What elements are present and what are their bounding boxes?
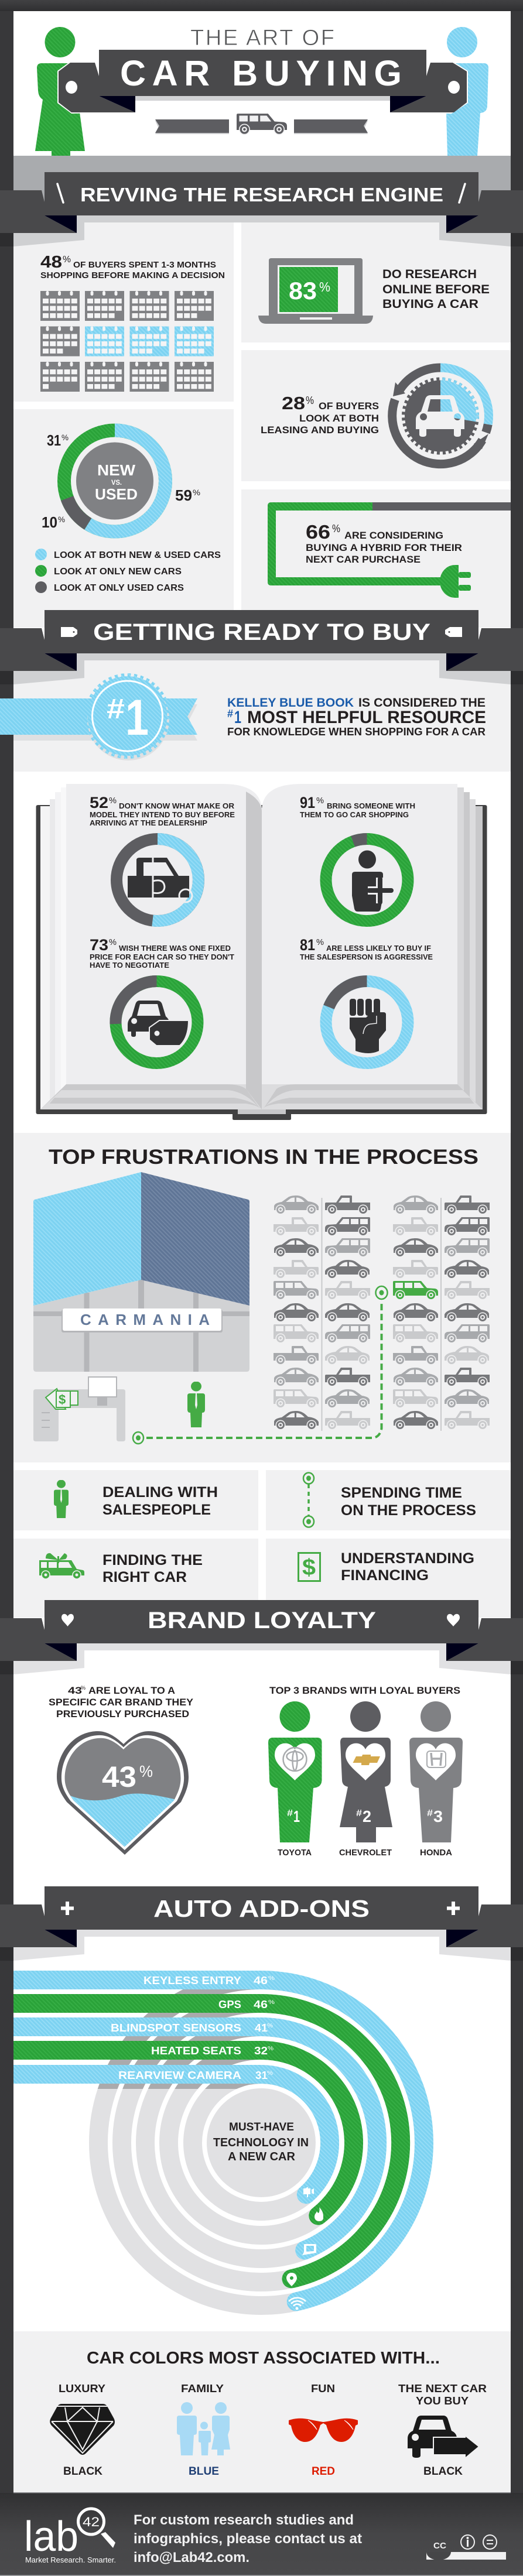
band labels: BLINDSPOT SENSORS	[111, 2022, 241, 2034]
column: next car: BLACK	[423, 2465, 463, 2478]
donut chart	[64, 430, 165, 532]
band labels: HEATED SEATS	[151, 2045, 241, 2057]
stat text: BUYING A HYBRID FOR THEIR	[306, 542, 462, 553]
stat text: LOOK AT BOTH	[299, 413, 379, 424]
brand figure: toyota: TOYOTA	[278, 1848, 312, 1858]
icon: price tags	[61, 627, 462, 637]
icon: chat bubble	[302, 2244, 316, 2255]
label	[341, 1485, 476, 1519]
loyalty stat text	[49, 1685, 194, 1719]
icon: plus signs	[61, 1902, 460, 1915]
band labels: %	[268, 1975, 275, 1982]
icon: map pin	[286, 2273, 297, 2286]
column: fun: FUN	[311, 2383, 335, 2395]
stat text: %	[63, 255, 71, 265]
ring chart with car and price tag	[115, 981, 198, 1063]
label	[102, 1484, 218, 1518]
panel: 83 percent online	[258, 258, 490, 324]
band labels: 46	[254, 1975, 268, 1986]
icon: carmania dealership: CARMANIA	[80, 1311, 210, 1328]
stat: 91 percent: THEM TO GO CAR SHOPPING	[300, 810, 409, 819]
label	[102, 1552, 203, 1585]
logo: lab42: lab	[24, 2513, 78, 2560]
stat: 91 percent: %	[316, 796, 324, 806]
label: UNDERSTANDING	[341, 1550, 474, 1567]
label: DEALING WITH	[102, 1484, 218, 1501]
donut labels: 10	[42, 513, 57, 531]
brand figure: chevrolet: #	[356, 1808, 362, 1818]
top brands heading: TOP 3 BRANDS WITH LOYAL BUYERS	[269, 1685, 460, 1696]
stat: 73 percent	[90, 936, 234, 1063]
heading: GETTING READY TO BUY	[93, 619, 430, 645]
legend: LOOK AT ONLY USED CARS	[54, 583, 184, 593]
icon: laptop: %	[319, 279, 330, 294]
icon: dollar bill	[299, 1553, 320, 1581]
heading: BRAND LOYALTY	[148, 1608, 376, 1633]
band labels: 46	[254, 1999, 268, 2010]
center label: TECHNOLOGY IN	[213, 2136, 309, 2149]
label: SPENDING TIME	[341, 1485, 462, 1501]
icon: laptop: 83	[289, 277, 317, 304]
band labels: %	[268, 2046, 274, 2052]
band labels: 41	[255, 2022, 268, 2034]
column: fun: RED	[312, 2465, 335, 2478]
stat text: ONLINE BEFORE	[382, 283, 490, 296]
stat text: OF BUYERS SPENT 1-3 MONTHS	[73, 260, 216, 270]
section banner: brand loyalty	[0, 1600, 523, 1674]
brand figure: honda: 3	[433, 1807, 443, 1825]
logo: lab42	[24, 2509, 116, 2564]
resource text: #	[227, 708, 233, 720]
stat text: DO RESEARCH	[382, 268, 477, 281]
label: RIGHT CAR	[102, 1569, 187, 1585]
footer background	[0, 2493, 523, 2576]
icon: diamond	[50, 2404, 115, 2455]
panel: hybrid	[268, 502, 511, 598]
icon: money tag	[46, 1389, 78, 1409]
panel: car colors	[13, 2331, 511, 2493]
logo: honda	[427, 1751, 446, 1767]
ring shadows under bands	[97, 1989, 425, 2089]
donut labels: %	[58, 515, 65, 524]
donut labels	[42, 431, 200, 531]
contact text	[134, 2512, 362, 2565]
contact text: info@Lab42.com.	[134, 2550, 249, 2565]
column: luxury	[50, 2383, 115, 2478]
logo: lab42: 42	[83, 2515, 100, 2529]
brand figure: toyota: #	[287, 1808, 293, 1818]
brand figure: chevrolet: CHEVROLET	[339, 1848, 392, 1858]
stat text	[261, 393, 379, 436]
resource text: 1	[234, 708, 241, 727]
stat text: BUYING A CAR	[382, 297, 478, 311]
center label	[213, 2121, 309, 2163]
loyalty stat text: PREVIOUSLY PURCHASED	[56, 1708, 189, 1719]
column: next car	[398, 2383, 487, 2478]
icon: dollar bill: $	[302, 1555, 316, 1580]
open book	[35, 784, 488, 1120]
column: next car: THE NEXT CAR	[398, 2383, 487, 2395]
icon: sales desk with monitor	[33, 1377, 125, 1441]
resource text	[227, 696, 486, 738]
column: family: FAMILY	[181, 2383, 224, 2395]
car lot grid	[274, 1195, 490, 1431]
panel: dealing with salespeople	[13, 1470, 258, 1530]
logo: toyota	[283, 1748, 307, 1771]
stat: 91 percent	[300, 794, 415, 921]
loyalty stat text: %	[81, 1685, 86, 1691]
brand figure: chevrolet	[339, 1701, 392, 1858]
book cover	[36, 805, 487, 1120]
stat text: %	[306, 395, 314, 406]
center disc	[207, 2088, 316, 2197]
ring chart with fist	[326, 981, 408, 1063]
label: SALESPEOPLE	[102, 1502, 211, 1518]
gray band behind first heading	[13, 156, 511, 222]
stat: 73 percent: 73	[90, 936, 108, 954]
band labels: %	[267, 2023, 273, 2029]
icon: salesperson	[54, 1480, 69, 1518]
panel: top frustrations	[13, 1133, 511, 1462]
title banner	[57, 50, 468, 114]
icon: sunglasses	[289, 2419, 358, 2442]
donut labels: 59	[175, 487, 192, 504]
stat: 52 percent: 52	[90, 794, 108, 811]
book pages	[66, 784, 457, 1114]
loyalty stat text: ARE LOYAL TO A	[88, 1685, 175, 1696]
center label: A NEW CAR	[228, 2150, 296, 2163]
gray rings	[89, 2089, 433, 2315]
heading: TOP FRUSTRATIONS IN THE PROCESS	[49, 1146, 478, 1169]
icon: loyalty heart chart: 43	[102, 1760, 136, 1793]
label: ON THE PROCESS	[341, 1502, 476, 1519]
stat: 52 percent: DON'T KNOW WHAT MAKE OR	[119, 801, 235, 810]
creative commons badge: CC	[433, 2541, 446, 2551]
creative commons badge	[426, 2535, 506, 2560]
stat text: 48	[40, 253, 62, 272]
panel: 28 percent leasing	[261, 368, 488, 464]
panel: spending time	[266, 1470, 511, 1530]
title line two: CAR BUYING	[120, 53, 402, 93]
column: next car: YOU BUY	[416, 2395, 469, 2407]
contact text: infographics, please contact us at	[134, 2531, 362, 2547]
stat text: 28	[282, 393, 305, 413]
stat: 81 percent: 81	[300, 936, 315, 954]
panel: finding the right car	[13, 1539, 258, 1618]
icon: carmania dealership	[33, 1172, 249, 1372]
stat: 73 percent: PRICE FOR EACH CAR SO THEY DON'T	[90, 953, 234, 961]
stat text: LEASING AND BUYING	[261, 424, 379, 436]
legend: LOOK AT BOTH NEW & USED CARS	[54, 550, 221, 560]
brand figure: honda	[409, 1701, 463, 1858]
road ribbon and car	[155, 114, 368, 135]
band icons	[286, 2187, 323, 2310]
column: luxury: BLACK	[63, 2465, 102, 2478]
colored bands	[13, 1980, 424, 2302]
stat text: SHOPPING BEFORE MAKING A DECISION	[40, 270, 225, 280]
stat text: %	[332, 523, 340, 535]
icon: wifi signal	[289, 2298, 306, 2306]
heading: CAR COLORS MOST ASSOCIATED WITH...	[87, 2349, 440, 2368]
header	[35, 26, 488, 156]
donut labels: 31	[47, 431, 61, 449]
icon: loyalty heart chart	[57, 1731, 189, 1855]
stat: 52 percent: ARRIVING AT THE DEALERSHIP	[90, 818, 207, 827]
label: FINANCING	[341, 1567, 429, 1584]
center label: MUST-HAVE	[229, 2121, 294, 2133]
column: family: BLUE	[189, 2465, 219, 2478]
title line one: THE ART OF	[190, 26, 334, 50]
stat: 73 percent: %	[109, 937, 117, 947]
band labels: KEYLESS ENTRY	[143, 1975, 241, 1986]
stat: 81 percent: ARE LESS LIKELY TO BUY IF	[326, 944, 431, 953]
brand figure: honda: #	[427, 1808, 433, 1818]
ribbon with number one badge	[0, 675, 197, 761]
stat: 52 percent: %	[109, 796, 117, 806]
heading: REVVING THE RESEARCH ENGINE	[80, 184, 443, 205]
dashed route to car	[133, 1286, 388, 1444]
icon: laptop	[258, 258, 373, 324]
logo: chevrolet	[353, 1755, 380, 1765]
band labels: 31	[255, 2070, 268, 2081]
stat: 81 percent: THE SALESPERSON IS AGGRESSIVE	[300, 953, 433, 961]
stat: 91 percent: BRING SOMEONE WITH	[327, 801, 415, 810]
stat text	[382, 268, 490, 311]
footer edge line	[0, 2575, 523, 2576]
stat: 52 percent: MODEL THEY INTEND TO BUY BEFORE	[90, 810, 235, 819]
icon: loyalty heart chart: %	[139, 1762, 153, 1780]
ring chart with person plus	[326, 839, 408, 921]
ring chart with puzzle car	[117, 839, 199, 921]
icon: gear with car and arrows	[392, 368, 488, 464]
stat: 52 percent	[90, 794, 235, 921]
icon: salesperson	[187, 1382, 205, 1427]
stat: 73 percent: HAVE TO NEGOTIATE	[90, 961, 169, 970]
section banner: getting ready to buy	[0, 610, 523, 684]
donut chart: VS.	[111, 478, 122, 487]
panels: research section	[13, 222, 511, 628]
section banner: auto add-ons	[0, 1886, 523, 1961]
column: luxury: LUXURY	[59, 2383, 105, 2395]
brand figure: toyota: 1	[293, 1807, 300, 1825]
icon: woman holding banner	[35, 27, 85, 156]
calendar grid	[40, 291, 214, 392]
icon: camera	[303, 2187, 314, 2197]
ribbon with number one badge: #	[107, 694, 125, 725]
icon: money tag: $	[59, 1392, 66, 1407]
logo: lab42: Market Research. Smarter.	[25, 2556, 116, 2564]
icon: car with arrow	[408, 2416, 479, 2458]
resource text: KELLEY BLUE BOOK	[227, 696, 354, 710]
band labels: GPS	[218, 1999, 241, 2010]
footer	[0, 2509, 523, 2576]
stat text: 66	[306, 521, 330, 543]
icon: man holding banner	[446, 27, 488, 156]
top background band	[0, 0, 523, 11]
band labels: %	[267, 2070, 273, 2077]
stat text: NEXT CAR PURCHASE	[306, 554, 421, 565]
panel: understanding financing	[266, 1539, 511, 1618]
resource text: FOR KNOWLEDGE WHEN SHOPPING FOR A CAR	[227, 726, 486, 738]
column: fun	[289, 2383, 358, 2478]
panel: kelley blue book background	[13, 660, 511, 772]
icon: family	[177, 2402, 230, 2455]
resource text: IS CONSIDERED THE	[358, 696, 486, 710]
kelley blue book block	[0, 675, 486, 761]
icon: pencils	[57, 184, 465, 203]
brand figure: chevrolet: 2	[363, 1807, 371, 1825]
add-ons ring chart	[13, 1975, 424, 2310]
icon: timeline	[303, 1473, 314, 1527]
panel: new vs used	[35, 430, 221, 593]
brand figure: honda: HONDA	[420, 1848, 452, 1858]
band labels: 32	[254, 2045, 268, 2057]
label	[341, 1550, 474, 1584]
resource text: MOST HELPFUL RESOURCE	[247, 708, 486, 727]
icon: hearts	[61, 1614, 460, 1626]
ribbon with number one badge: 1	[125, 690, 149, 746]
section banner: revving the research engine	[0, 172, 523, 246]
brand figure: toyota	[268, 1701, 322, 1858]
donut chart: NEW	[97, 461, 135, 479]
icon: power cord and plug	[268, 502, 511, 598]
legend	[35, 549, 221, 593]
band labels: %	[268, 1999, 275, 2006]
stat: 81 percent	[300, 936, 433, 1063]
icon: flame	[315, 2207, 323, 2221]
stat text: ARE CONSIDERING	[344, 530, 443, 541]
stat: 73 percent: WISH THERE WAS ONE FIXED	[119, 944, 231, 953]
panel: 48 percent shopping	[40, 253, 225, 392]
band labels: REARVIEW CAMERA	[118, 2070, 241, 2081]
band labels	[111, 1975, 275, 2081]
stat text	[306, 521, 462, 565]
heading: AUTO ADD-ONS	[153, 1895, 370, 1922]
donut labels: %	[193, 488, 200, 497]
stat text: OF BUYERS	[319, 400, 379, 412]
column: family	[177, 2383, 230, 2478]
icon: gift car	[39, 1553, 84, 1579]
donut chart: USED	[95, 485, 138, 503]
page stacks	[35, 787, 488, 1109]
label: FINDING THE	[102, 1552, 203, 1568]
donut labels: %	[61, 433, 69, 442]
loyalty stat text: 43	[68, 1685, 82, 1696]
legend: LOOK AT ONLY NEW CARS	[54, 567, 182, 577]
stat text	[40, 253, 225, 280]
contact text: For custom research studies and	[134, 2512, 354, 2528]
stat: 91 percent: 91	[300, 794, 315, 811]
stat: 81 percent: %	[316, 937, 324, 947]
loyalty stat text: SPECIFIC CAR BRAND THEY	[49, 1697, 194, 1708]
